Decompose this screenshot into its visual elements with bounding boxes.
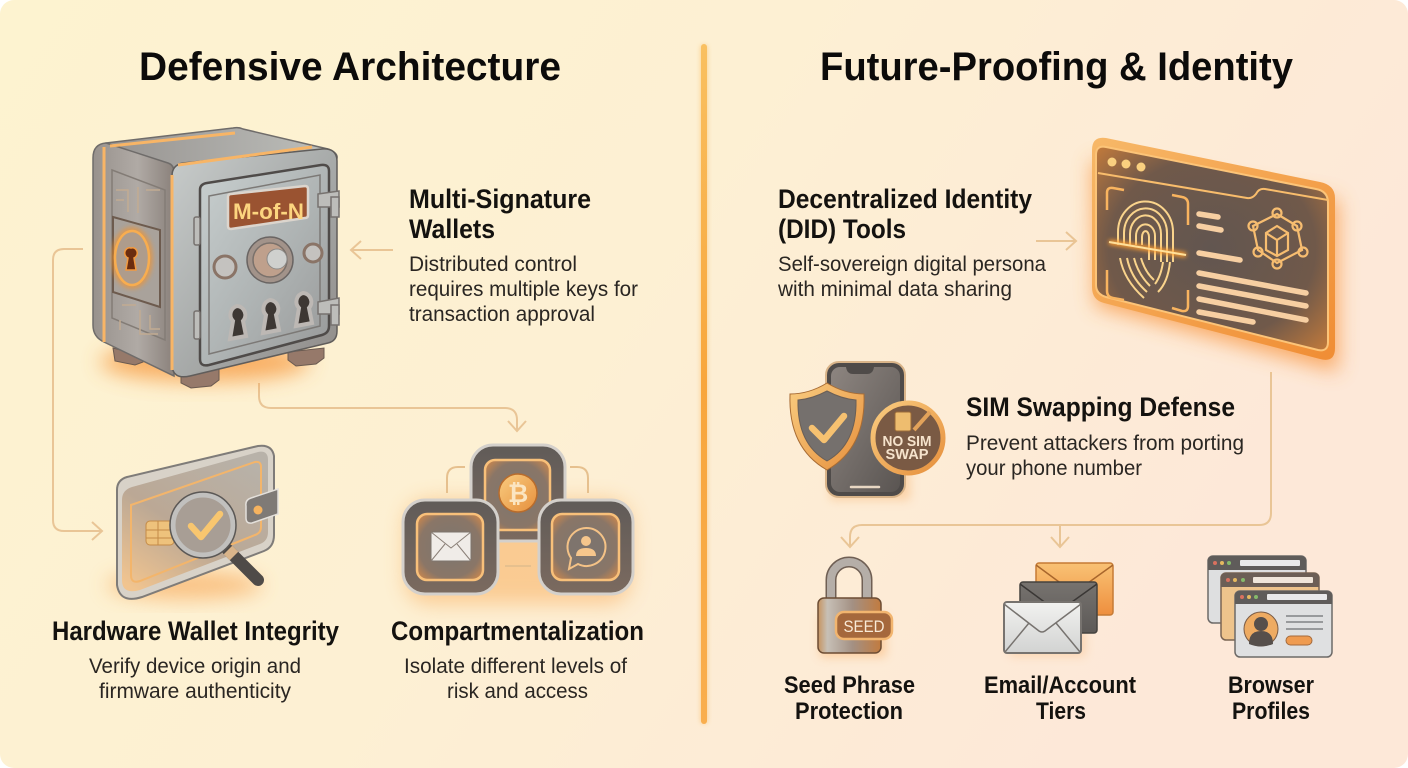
icon: digital identity card bbox=[1092, 138, 1338, 372]
email tile bbox=[403, 500, 498, 594]
safe top bbox=[100, 128, 337, 172]
magnifier bbox=[228, 550, 258, 580]
text block: Multi-Signature Wallets: Wallets bbox=[409, 214, 495, 244]
center divider bbox=[700, 44, 708, 724]
arrows: card to bottom icons bbox=[841, 372, 1271, 547]
M-of-N plate bbox=[228, 186, 308, 229]
bitcoin tile: ₿ bbox=[508, 480, 528, 508]
label: Browser Profiles: Browser bbox=[1228, 672, 1314, 699]
side lock plate bbox=[113, 217, 160, 307]
fingerprint bbox=[1118, 201, 1173, 298]
title bar bbox=[1098, 173, 1328, 200]
text block: Multi-Signature Wallets: transaction approval bbox=[409, 302, 595, 326]
bitcoin tile bbox=[471, 445, 565, 541]
text block: SIM Swapping Defense: SIM Swapping Defense bbox=[966, 392, 1235, 422]
door bbox=[200, 165, 329, 365]
icon: email tiers bbox=[1004, 563, 1113, 656]
label: Email/Account Tiers: Email/Account bbox=[984, 672, 1136, 699]
persona tile bbox=[539, 500, 633, 594]
network cube bbox=[1248, 208, 1308, 268]
icon: browser profiles bbox=[1208, 556, 1332, 657]
text block: SIM Swapping Defense bbox=[966, 392, 1244, 480]
text block: Hardware Wallet Integrity: Verify device origin and bbox=[89, 654, 301, 678]
scan line bbox=[1109, 242, 1186, 255]
safe side bbox=[93, 143, 174, 376]
icon: seed padlock: SEED bbox=[844, 617, 884, 636]
text block: Multi-Signature Wallets: Multi-Signature bbox=[409, 184, 591, 214]
arrow: safe to hardware wallet bbox=[53, 249, 102, 540]
arrow: wallets to safe bbox=[351, 241, 393, 259]
text block: Hardware Wallet Integrity: firmware authenticity bbox=[99, 679, 291, 703]
arrow: safe to compartmentalization bbox=[259, 383, 526, 431]
text block: Decentralized Identity Tools: (DID) Tools bbox=[778, 214, 906, 244]
icon: compartment tiles bbox=[403, 445, 633, 604]
wallet body bbox=[122, 452, 268, 591]
icon: hardware wallet with magnifier bbox=[107, 446, 278, 599]
text block: Decentralized Identity Tools bbox=[777, 184, 1046, 301]
text block: SIM Swapping Defense: your phone number bbox=[966, 456, 1142, 480]
chip bbox=[146, 521, 174, 545]
icon: M-of-N safe bbox=[93, 128, 339, 388]
safe front bbox=[172, 149, 337, 377]
text block: Compartmentalization bbox=[391, 616, 644, 703]
label: Browser Profiles bbox=[1228, 672, 1314, 725]
tile connectors bbox=[447, 467, 588, 566]
icon: phone, shield and no-SIM badge bbox=[790, 362, 943, 500]
text block: Compartmentalization: risk and access bbox=[447, 679, 588, 703]
safe feet bbox=[113, 348, 324, 388]
arrow: DID to card bbox=[1036, 232, 1076, 250]
label: Email/Account Tiers bbox=[984, 672, 1136, 725]
text block: Compartmentalization: Compartmentalization bbox=[391, 616, 644, 646]
data lines bbox=[1199, 214, 1306, 322]
icon: seed padlock bbox=[818, 562, 892, 657]
card slab bbox=[1092, 138, 1335, 360]
badge bbox=[873, 403, 943, 473]
hinges bbox=[194, 191, 339, 339]
scan brackets bbox=[1107, 188, 1188, 311]
heading: Defensive Architecture: Defensive Architecture bbox=[139, 45, 561, 89]
glowing edges bbox=[104, 133, 312, 370]
text block: Multi-Signature Wallets: Distributed control bbox=[409, 252, 577, 276]
icon: phone, shield and no-SIM badge: SWAP bbox=[886, 446, 928, 463]
text block: SIM Swapping Defense: Prevent attackers from porting bbox=[966, 431, 1244, 455]
text block: Hardware Wallet Integrity bbox=[52, 616, 339, 703]
side panel circuits bbox=[112, 170, 165, 340]
back window bbox=[1208, 556, 1306, 623]
text block: Decentralized Identity Tools: Decentralized Identity bbox=[778, 184, 1032, 214]
dial bbox=[247, 237, 293, 283]
text block: Hardware Wallet Integrity: Hardware Wallet Integrity bbox=[52, 616, 339, 646]
label: Seed Phrase Protection: Protection bbox=[795, 698, 903, 725]
label: Seed Phrase Protection: Seed Phrase bbox=[784, 672, 915, 699]
M-of-N plate: M-of-N bbox=[233, 199, 304, 224]
text block: Multi-Signature Wallets bbox=[409, 184, 638, 326]
label: Email/Account Tiers: Tiers bbox=[1036, 698, 1086, 725]
wallet back slab bbox=[117, 446, 274, 599]
heading: Future-Proofing & Identity: Future-Proofing & Identity bbox=[820, 45, 1294, 89]
label: Browser Profiles: Profiles bbox=[1232, 698, 1310, 725]
text block: Decentralized Identity Tools: Self-sovereign digital persona bbox=[778, 252, 1046, 276]
three keyholes bbox=[230, 293, 312, 339]
clasp bbox=[246, 489, 278, 523]
middle window bbox=[1221, 573, 1319, 640]
text block: Multi-Signature Wallets: requires multiple keys for bbox=[409, 277, 638, 301]
text block: Compartmentalization: Isolate different levels of bbox=[404, 654, 627, 678]
front window bbox=[1235, 591, 1332, 657]
knobs bbox=[214, 256, 236, 278]
icon: phone, shield and no-SIM badge: NO SIM bbox=[882, 433, 932, 450]
shield bbox=[790, 383, 864, 470]
text block: Decentralized Identity Tools: with minimal data sharing bbox=[777, 277, 1012, 301]
phone bbox=[826, 362, 905, 497]
label: Seed Phrase Protection bbox=[784, 672, 915, 725]
